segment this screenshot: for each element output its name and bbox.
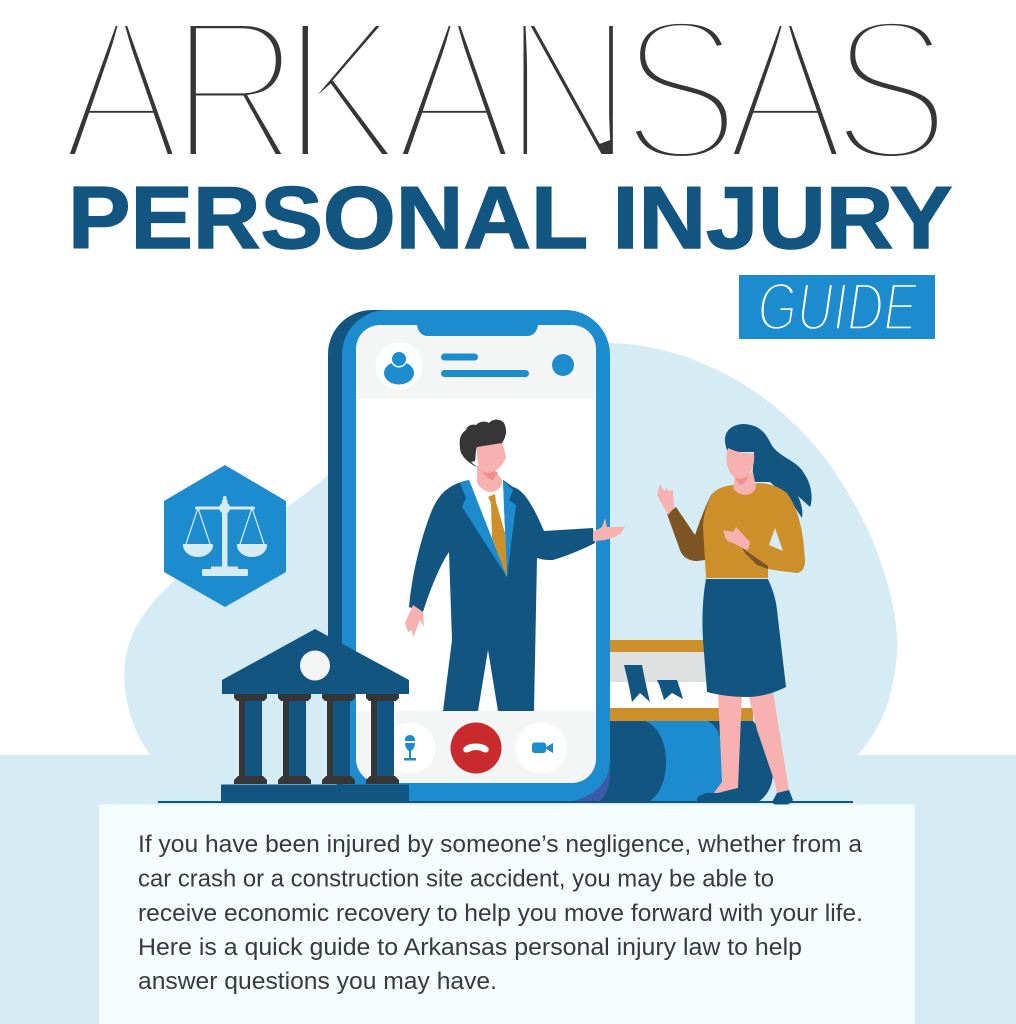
- hexagon scales icon: [164, 465, 286, 607]
- woman hair: [725, 424, 812, 518]
- intro text: [138, 831, 863, 995]
- man suit: [409, 480, 595, 711]
- man neck: [477, 465, 502, 492]
- woman legs: [713, 692, 789, 794]
- woman neck: [733, 472, 756, 495]
- woman skirt: [702, 579, 786, 697]
- notch: [417, 325, 538, 336]
- man left hand: [405, 605, 424, 638]
- background blob: [124, 343, 897, 755]
- status dot: [552, 354, 574, 376]
- woman sweater: [703, 483, 805, 578]
- woman face: [727, 448, 754, 479]
- woman shoes: [697, 788, 793, 806]
- man tie: [488, 494, 507, 577]
- video button: [516, 722, 566, 774]
- video area: [356, 399, 596, 711]
- man right hand: [593, 518, 625, 541]
- plinth: [221, 784, 409, 802]
- woman dark sleeve: [667, 492, 713, 561]
- phone screen: [356, 325, 596, 783]
- column 1: [234, 694, 267, 784]
- roof: [222, 629, 409, 694]
- woman: [657, 424, 812, 806]
- background band: [0, 755, 1016, 1024]
- courthouse: [221, 629, 409, 802]
- phone: [328, 310, 610, 802]
- roof medallion: [300, 650, 330, 680]
- intro text: car crash or a construction site accident, you may be able to: [138, 866, 774, 892]
- woman raised hand: [657, 484, 674, 515]
- column 3: [322, 694, 355, 784]
- end call button: [450, 722, 502, 774]
- intro text: answer questions you may have.: [138, 968, 497, 995]
- mic button: [384, 722, 436, 774]
- caller name bars: [441, 354, 529, 377]
- intro text: receive economic recovery to help you move forward with your life.: [138, 900, 863, 927]
- column 2: [278, 694, 311, 784]
- ground line: [158, 801, 853, 803]
- intro text: Here is a quick guide to Arkansas personal injury law to help: [138, 934, 802, 961]
- woman arm shadow: [742, 548, 768, 569]
- avatar: [376, 342, 422, 390]
- intro text: If you have been injured by someone’s negligence, whether from a: [138, 831, 862, 858]
- guide badge: GUIDE: [758, 269, 918, 345]
- woman chest hand: [723, 527, 750, 550]
- man lapels: [460, 480, 516, 577]
- books: [600, 640, 773, 802]
- man hair: [460, 420, 506, 467]
- man face: [477, 441, 506, 473]
- intro panel: [99, 804, 915, 1024]
- man lawyer: [405, 420, 625, 711]
- title: Personal Injury: PERSONAL INJURY: [68, 170, 952, 267]
- column 4: [366, 694, 399, 784]
